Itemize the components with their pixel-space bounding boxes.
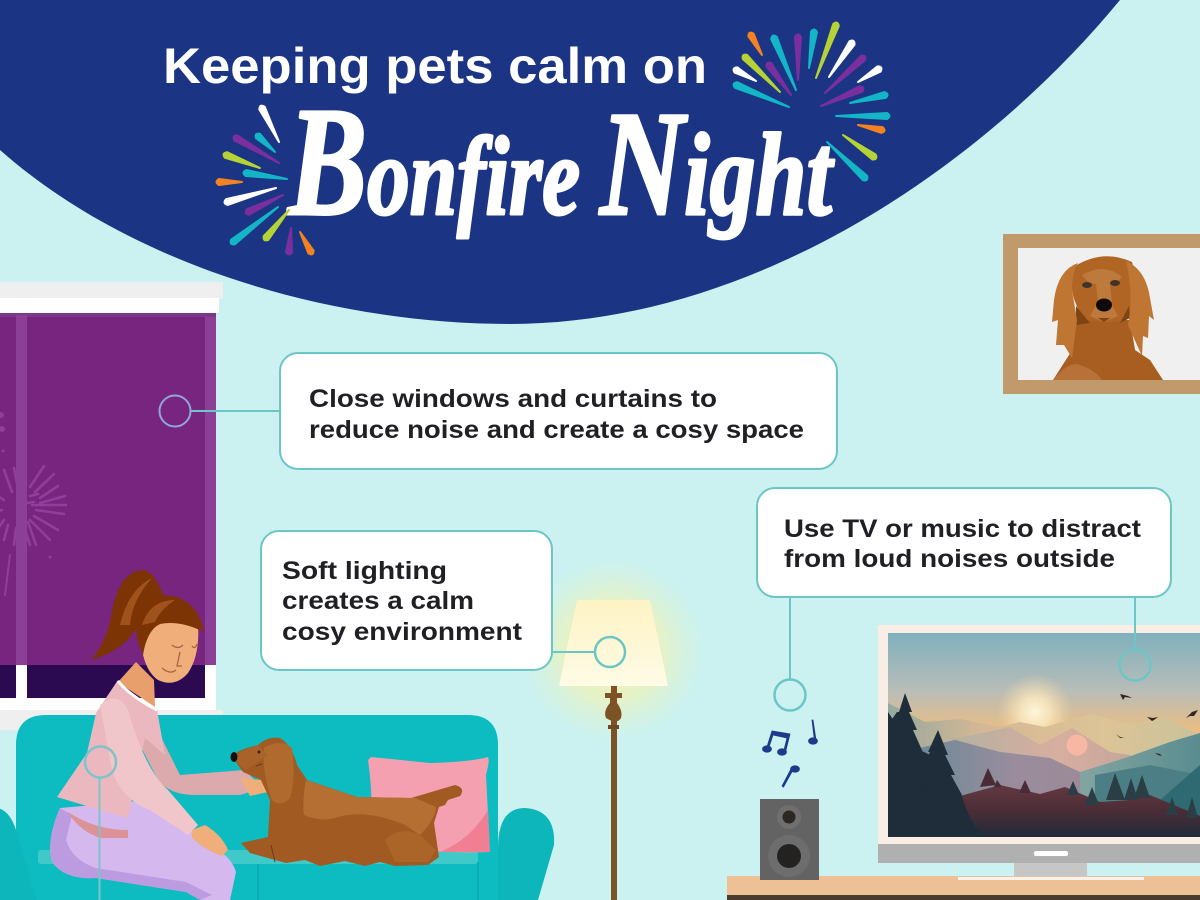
collar <box>118 681 157 710</box>
tv <box>878 625 1200 876</box>
dog muzzle <box>234 745 268 770</box>
callout: close windows and curtains <box>160 353 837 469</box>
hair <box>135 595 204 655</box>
callout: close windows and curtains: reduce noise and create a cosy space <box>309 416 804 444</box>
trouser shadow <box>50 808 212 900</box>
callout: tv or music: from loud noises outside <box>784 545 1115 573</box>
speaker <box>760 799 819 880</box>
table <box>727 876 1200 900</box>
dog haunch <box>385 831 436 862</box>
sofa <box>0 715 554 900</box>
callout: close windows and curtains: Close windows and curtains to <box>309 385 717 413</box>
callout: soft lighting <box>261 531 625 670</box>
far arm <box>140 725 262 795</box>
title: Keeping pets calm on: Keeping pets calm on <box>163 38 707 94</box>
callout: soft lighting: creates a calm <box>282 587 474 615</box>
connector: woman marker <box>85 746 116 900</box>
window with curtain <box>0 282 223 730</box>
dog ear <box>264 743 294 804</box>
title banner <box>0 0 1120 324</box>
torso <box>57 680 165 818</box>
shirt hem inner <box>68 812 128 838</box>
face details <box>162 644 197 672</box>
icon: firework right <box>734 23 890 180</box>
callout: soft lighting: Soft lighting <box>282 557 447 585</box>
hand <box>192 825 228 856</box>
tv screen <box>888 633 1200 837</box>
face <box>142 619 198 683</box>
title: Bonfire Night: Bonfire <box>286 75 580 248</box>
icon: music notes <box>762 720 818 787</box>
title: Bonfire Night: Night <box>598 81 834 247</box>
callout: tv or music: Use TV or music to distract <box>784 515 1142 543</box>
neck <box>118 662 155 707</box>
callout: soft lighting: cosy environment <box>282 618 523 646</box>
dog on sofa <box>230 738 462 866</box>
woman <box>50 570 268 900</box>
hand under chin <box>240 778 268 796</box>
near arm <box>100 699 198 835</box>
birds <box>1116 694 1198 756</box>
floor lamp <box>521 558 705 900</box>
icon: firework left <box>216 106 314 254</box>
title: Bonfire Night <box>286 75 834 248</box>
callout: tv or music <box>757 488 1171 710</box>
dog back highlight <box>303 780 436 835</box>
ponytail <box>91 570 165 660</box>
trousers <box>50 800 236 900</box>
pillow <box>368 757 490 852</box>
trees <box>888 693 962 795</box>
portrait of dog <box>1003 234 1200 394</box>
